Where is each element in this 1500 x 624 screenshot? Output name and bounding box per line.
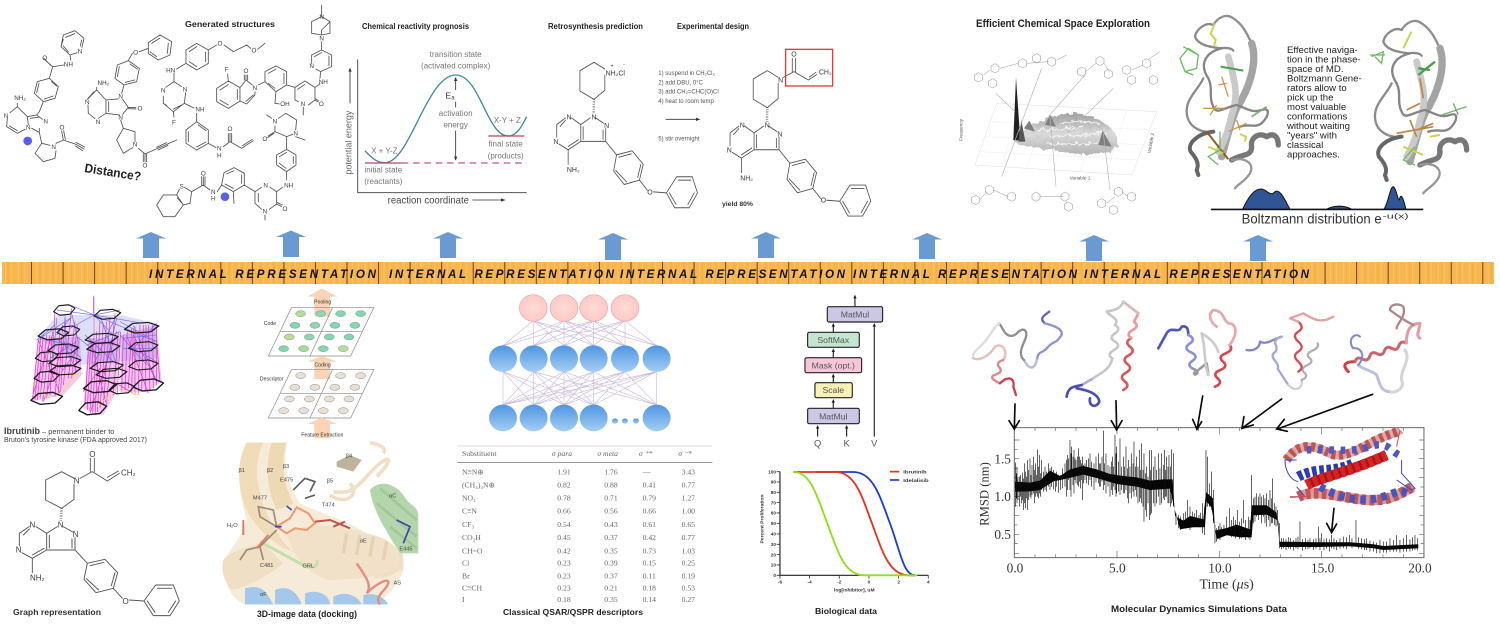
chart: reaction energy diagram: (activated complex) bbox=[421, 62, 491, 71]
chart: chemical space surface plot: Variable 1 bbox=[1070, 175, 1091, 180]
chart: Boltzmann distribution: -u(x) bbox=[1383, 213, 1409, 220]
table: QSAR descriptors: 0.78 bbox=[557, 494, 571, 503]
heading: biological data: Biological data bbox=[815, 606, 877, 616]
text: experimental procedure: 4) heat to room temp bbox=[658, 99, 715, 105]
molecule: retrosynthesis precursor bbox=[553, 61, 698, 208]
chart: reaction energy diagram: a bbox=[451, 96, 455, 102]
chart: RMSD time series: RMSD (nm) bbox=[978, 462, 992, 526]
conformation 2 bbox=[1067, 302, 1138, 406]
molecule: generated 5: S bbox=[180, 183, 184, 190]
band: internal representation: INTERNAL REPRESENTATION bbox=[853, 268, 1078, 281]
molecule: generated 4: OH bbox=[280, 101, 290, 108]
chart: dose response: 20 bbox=[771, 552, 776, 557]
molecule: ibrutinib graph representation: N bbox=[73, 530, 79, 539]
molecule: retrosynthesis precursor: - bbox=[623, 61, 625, 67]
table: QSAR descriptors: 0.77 bbox=[682, 480, 695, 489]
chart: reaction energy diagram: initial state bbox=[364, 165, 403, 174]
diagram: 3D convolution grids: Code bbox=[264, 321, 276, 327]
table: QSAR descriptors: C≡N bbox=[462, 507, 477, 516]
trace core bbox=[1015, 466, 1418, 550]
conformation 4 bbox=[1247, 313, 1333, 389]
table: QSAR descriptors: 0.54 bbox=[557, 520, 571, 529]
table: QSAR descriptors: 0.66 bbox=[643, 507, 656, 516]
table: QSAR descriptors: 0.37 bbox=[604, 533, 618, 542]
chart: dose response: 10 bbox=[771, 563, 776, 568]
molecule: generated 3: F bbox=[172, 119, 176, 126]
table: QSAR descriptors: 0.66 bbox=[557, 507, 571, 516]
molecule: generated 5: O bbox=[201, 171, 206, 178]
molecule: retrosynthesis precursor: N bbox=[566, 114, 572, 121]
molecule: reference ligand with distance marker: N bbox=[78, 48, 83, 55]
text: yield: yield 80% bbox=[722, 201, 753, 208]
chart: chemical space surface plot: Frequency bbox=[959, 118, 964, 141]
molecule: generated 2: N bbox=[118, 114, 123, 121]
chart: dose response: 2 bbox=[897, 579, 900, 584]
molecule: ibrutinib graph representation: N bbox=[74, 477, 80, 486]
molecule: experimental product: N bbox=[740, 123, 745, 130]
chart: RMSD time series: Time (μs) bbox=[1199, 577, 1254, 592]
table: QSAR descriptors: 0.65 bbox=[682, 520, 695, 529]
table: QSAR descriptors: 0.27 bbox=[682, 595, 695, 604]
molecule: generated 3: N bbox=[183, 87, 188, 94]
illustration: docking 3D view: E475 bbox=[280, 478, 293, 484]
table: QSAR descriptors: 0.23 bbox=[557, 584, 571, 593]
chart: reaction energy diagram: transition state bbox=[430, 50, 482, 59]
arrow: feature extraction bbox=[307, 418, 337, 438]
chart: RMSD time series: 20.0 bbox=[1408, 561, 1432, 576]
molecule: generated 4: O bbox=[319, 101, 324, 108]
table: QSAR descriptors: σ para bbox=[552, 449, 572, 458]
molecule: reference ligand with distance marker bbox=[4, 31, 85, 162]
text: experimental procedure: 2) add DBU, 0°C bbox=[658, 80, 704, 86]
conformation 1 bbox=[973, 312, 1062, 395]
arrow: pooling bbox=[307, 288, 337, 317]
text: Ibrutinib description: Ibrutinib – permanent binder to bbox=[4, 426, 114, 436]
illustration: docking 3D view: E445 bbox=[399, 546, 413, 552]
illustration: protein conformation B bbox=[1370, 21, 1467, 193]
molecule: reference ligand with distance marker: O bbox=[42, 55, 47, 62]
chart: dose response: 100 bbox=[768, 469, 776, 474]
molecule: retrosynthesis precursor: O bbox=[647, 189, 653, 196]
molecule: experimental product: O bbox=[821, 198, 827, 205]
table: QSAR descriptors: 0.37 bbox=[604, 571, 618, 580]
molecule: experimental product: N bbox=[765, 122, 770, 129]
chart: RMSD time series: 0.0 bbox=[1007, 561, 1024, 576]
chart: reaction energy diagram: reaction coordinate bbox=[388, 195, 469, 206]
molecule: generated 5 bbox=[157, 113, 305, 220]
molecule: generated 3 bbox=[161, 41, 265, 159]
molecule: generated 4: NH bbox=[319, 79, 328, 86]
text: Ibrutinib description bbox=[4, 426, 147, 444]
table: QSAR descriptors: 0.11 bbox=[643, 571, 656, 580]
chart: Boltzmann distribution: Boltzmann distribution e bbox=[1242, 210, 1382, 226]
chart: dose response: log[inhibitor], uM bbox=[834, 588, 875, 594]
molecule: generated 3: O bbox=[228, 126, 233, 133]
molecule: reference ligand with distance marker: N bbox=[26, 125, 31, 132]
table: QSAR descriptors: 0.42 bbox=[643, 533, 656, 542]
molecule: generated 2: O bbox=[143, 163, 148, 170]
table: QSAR descriptors: 0.79 bbox=[643, 494, 656, 503]
illustration: docking 3D view: AS bbox=[394, 581, 401, 587]
diagram: scaled dot product attention: Q bbox=[814, 438, 821, 448]
molecule: generated 2: N bbox=[118, 94, 123, 101]
molecule: generated 4: N bbox=[319, 36, 324, 43]
table: QSAR descriptors: N≡N⊕ bbox=[462, 467, 484, 476]
chart: dose response: -2 bbox=[837, 579, 842, 584]
molecule: generated 5: N bbox=[211, 189, 216, 196]
table: QSAR descriptors: 3.43 bbox=[682, 467, 695, 476]
molecule: ibrutinib graph representation: O bbox=[123, 597, 129, 606]
chart: reaction energy diagram bbox=[344, 50, 527, 206]
chart: reaction energy diagram: activation bbox=[439, 109, 473, 118]
table: QSAR descriptors: Br bbox=[462, 571, 470, 580]
table: QSAR descriptors: CF₃ bbox=[462, 520, 474, 529]
chart: reaction energy diagram: (products) bbox=[488, 151, 524, 160]
heading: chemical space: Efficient Chemical Space Exploration bbox=[976, 18, 1150, 30]
highlight: red box around acryl group bbox=[786, 49, 833, 86]
molecule: generated 5: N bbox=[273, 118, 278, 125]
molecule: retrosynthesis precursor: NH₂ bbox=[567, 167, 580, 174]
molecule: generated 3: N bbox=[161, 88, 166, 95]
diagram: 3D convolution grids: Descriptor bbox=[260, 377, 284, 383]
heading: chemical reactivity: Chemical reactivity prognosis bbox=[362, 22, 469, 31]
chart: dose response: 30 bbox=[771, 542, 776, 547]
text: experimental procedure bbox=[658, 71, 719, 142]
arrows: eight blue upward arrows bbox=[136, 230, 1273, 261]
table: QSAR descriptors: 0.14 bbox=[643, 595, 656, 604]
illustration: docking 3D view: C481 bbox=[260, 563, 273, 569]
icon: blue dot on reference ligand bbox=[23, 137, 32, 145]
molecule: generated 4: F bbox=[225, 67, 229, 74]
molecule: reference ligand with distance marker: N bbox=[4, 113, 9, 120]
trace spikes bbox=[1015, 431, 1417, 553]
table: QSAR descriptors: 1.00 bbox=[682, 507, 695, 516]
molecule: generated 3: HN bbox=[166, 67, 176, 74]
table: QSAR descriptors: 0.73 bbox=[643, 546, 656, 555]
molecule: generated 5: H bbox=[211, 196, 216, 203]
heading: QSAR descriptors: Classical QSAR/QSPR descriptors bbox=[503, 607, 643, 617]
molecule: generated 2: NH₂ bbox=[98, 80, 110, 87]
text: effective navigation: without waiting bbox=[1286, 121, 1350, 132]
molecule: generated 2: N bbox=[133, 142, 138, 149]
illustration: protein conformation A bbox=[1180, 16, 1278, 188]
chart: dose response: 0 bbox=[773, 573, 776, 578]
diagram: scaled dot product attention: Mask (opt.) bbox=[812, 360, 855, 370]
molecule: ibrutinib graph representation: N bbox=[58, 521, 64, 530]
chart: reaction energy diagram: potential energy bbox=[344, 110, 354, 175]
diagram: 3D convolution grids bbox=[260, 288, 374, 439]
molecule: generated 2: O bbox=[138, 106, 143, 113]
text: Ibrutinib description: Bruton's tyrosine kinase (FDA approved 2017) bbox=[4, 437, 147, 444]
heading: experimental design: Experimental design bbox=[677, 21, 749, 31]
molecule: reference ligand with distance marker: NH bbox=[64, 62, 73, 69]
molecule: generated 4: N bbox=[253, 85, 258, 92]
diagram: 3D convolution grids: Coding bbox=[314, 363, 331, 369]
molecule: reference ligand with distance marker: N bbox=[51, 144, 56, 151]
molecule: retrosynthesis precursor: + bbox=[610, 64, 614, 70]
text: experimental procedure: 1) suspend in CH₂Cl₂ bbox=[658, 71, 716, 77]
table: QSAR descriptors: CO₂H bbox=[462, 533, 481, 542]
table: QSAR descriptors: CH=O bbox=[462, 546, 483, 555]
table: QSAR descriptors: σ meta bbox=[597, 449, 618, 458]
chart: dose response: Idelalisib bbox=[903, 478, 929, 484]
label: distance question: Distance? bbox=[84, 161, 142, 184]
arrows: conformations to time points bbox=[1009, 394, 1373, 533]
molecule: generated 3: H bbox=[217, 152, 222, 159]
illustration: docking 3D view bbox=[222, 443, 418, 604]
table: QSAR descriptors: — bbox=[642, 467, 651, 476]
text: effective navigation: classical bbox=[1287, 140, 1323, 151]
band: internal representation bbox=[2, 262, 1494, 284]
band: internal representation: INTERNAL REPRESENTATION bbox=[620, 268, 846, 281]
chart: dose response: -6 bbox=[778, 579, 782, 584]
chart: reaction energy diagram: X-Y + Z bbox=[494, 116, 521, 125]
chart: dose response: 70 bbox=[771, 500, 776, 505]
band: internal representation: INTERNAL REPRESENTATION bbox=[1084, 268, 1310, 281]
molecule: generated 5: N bbox=[263, 182, 268, 189]
molecule: generated 5: O bbox=[283, 206, 288, 213]
table: QSAR descriptors: 0.21 bbox=[604, 584, 618, 593]
molecule: experimental product: NH₂ bbox=[740, 175, 753, 182]
illustration: docking 3D view: αF bbox=[260, 592, 267, 598]
table: QSAR descriptors: 1.27 bbox=[682, 494, 695, 503]
molecule: reference ligand with distance marker: O bbox=[60, 125, 65, 132]
diagram: scaled dot product attention: Scale bbox=[822, 385, 844, 395]
band: internal representation: INTERNAL REPRESENTATION bbox=[149, 268, 377, 281]
chart: dose response: 0 bbox=[868, 579, 871, 584]
molecule: generated 3: NH bbox=[195, 106, 205, 113]
icon: blue dot on generated molecule bbox=[221, 192, 229, 201]
molecule: generated 5: N bbox=[263, 208, 268, 215]
table: QSAR descriptors: 0.35 bbox=[604, 595, 618, 604]
molecule: ibrutinib graph representation: O bbox=[89, 450, 95, 459]
diagram: scaled dot product attention: SoftMax bbox=[817, 335, 850, 345]
table: QSAR descriptors: 0.23 bbox=[557, 558, 571, 567]
molecule: ibrutinib graph representation: CH₂ bbox=[121, 468, 136, 477]
chart: dose response: 50 bbox=[771, 521, 776, 526]
diagram: 3D convolution grids: Pooling bbox=[314, 299, 331, 305]
chart: reaction energy diagram: final state bbox=[489, 140, 523, 149]
table: QSAR descriptors: C≡CH bbox=[462, 584, 483, 593]
molecule: generated 5: NH bbox=[284, 182, 294, 189]
table: QSAR descriptors: 1.76 bbox=[604, 467, 618, 476]
chart: Boltzmann distribution bbox=[1211, 187, 1423, 226]
table: QSAR descriptors: 1.03 bbox=[682, 546, 695, 555]
text: effective navigation: rators allow to bbox=[1287, 83, 1347, 94]
illustration: docking 3D view: β1 bbox=[238, 468, 245, 474]
chart: reaction energy diagram: X + Y-Z bbox=[371, 147, 398, 156]
molecule: generated 3: O bbox=[252, 47, 257, 54]
conformation 3 bbox=[1158, 310, 1235, 387]
illustration: docking 3D view: αE bbox=[360, 539, 367, 545]
molecule sketches around the plot bbox=[972, 52, 1160, 215]
chart: RMSD time series: 5.0 bbox=[1109, 561, 1126, 576]
text: experimental procedure: 3) add CH₂=CHC(O)Cl bbox=[658, 90, 719, 96]
heading: graph representation: Graph representation bbox=[13, 607, 101, 617]
chart: RMSD time series: 1.0 bbox=[994, 489, 1011, 504]
table: QSAR descriptors: σ ⁻* bbox=[678, 449, 692, 458]
table: QSAR descriptors: Cl bbox=[462, 558, 469, 567]
table: QSAR descriptors: 0.18 bbox=[557, 595, 571, 604]
table: QSAR descriptors: σ ⁺* bbox=[639, 449, 653, 458]
inset: folded protein overlay bbox=[1285, 430, 1415, 500]
diagram: scaled dot product attention: MatMul bbox=[841, 309, 869, 319]
text: effective navigation: tion in the phase- bbox=[1287, 54, 1361, 66]
molecule: generated 4: N bbox=[309, 63, 314, 70]
table: QSAR descriptors: 0.35 bbox=[604, 546, 618, 555]
molecule: generated 3: N bbox=[217, 146, 222, 153]
text: experimental procedure: 5) stir overnight bbox=[658, 136, 700, 142]
molecule: generated 2: N bbox=[85, 99, 90, 106]
illustration: docking 3D view: T474 bbox=[322, 502, 335, 508]
chart: dose response: 90 bbox=[771, 480, 776, 485]
chart: dose response: 80 bbox=[771, 490, 776, 495]
molecule: experimental product: O bbox=[791, 51, 797, 58]
molecule: experimental product: N bbox=[777, 131, 782, 138]
text: effective navigation: most valuable bbox=[1287, 102, 1346, 113]
table: QSAR descriptors: 1.91 bbox=[557, 467, 571, 476]
chart: dose response: 4 bbox=[927, 579, 930, 584]
diagram: scaled dot product attention: K bbox=[844, 438, 851, 448]
illustration: docking 3D view: β4 bbox=[346, 454, 352, 460]
table: QSAR descriptors: 0.23 bbox=[557, 571, 571, 580]
molecule: reference ligand with distance marker: N bbox=[43, 119, 48, 126]
table: QSAR descriptors: 0.41 bbox=[643, 480, 656, 489]
table: QSAR descriptors: 0.39 bbox=[604, 558, 618, 567]
chart: RMSD time series: 1.5 bbox=[994, 451, 1011, 466]
table: QSAR descriptors: 0.19 bbox=[682, 571, 695, 580]
molecule: generated 4: N bbox=[301, 101, 306, 108]
conformation 5 bbox=[1345, 304, 1420, 392]
molecule: generated 5: O bbox=[263, 136, 268, 143]
molecule: ibrutinib graph representation bbox=[16, 450, 179, 616]
molecule: experimental product: N bbox=[778, 78, 783, 85]
molecule: experimental product: CH₂ bbox=[819, 70, 832, 77]
chart: dose response: Percent Proliferation bbox=[760, 494, 766, 543]
molecule: ibrutinib graph representation: NH₂ bbox=[30, 573, 45, 582]
chart: dose response bbox=[760, 469, 930, 594]
illustrations: MD unfolded conformations bbox=[973, 302, 1420, 406]
chart: chemical space surface plot: Variable 2 bbox=[1147, 132, 1155, 154]
table: QSAR descriptors: 0.88 bbox=[604, 480, 618, 489]
molecule: generated 2: N bbox=[96, 119, 101, 126]
chart: RMSD time series: 0.5 bbox=[994, 527, 1011, 542]
molecule: generated 4: N bbox=[319, 14, 324, 21]
chart: dose response: Ibrutinib bbox=[903, 469, 927, 475]
heading: retrosynthesis: Retrosynthesis prediction bbox=[548, 21, 643, 31]
molecule: retrosynthesis precursor: N bbox=[604, 123, 609, 130]
molecule: ibrutinib graph representation: N bbox=[16, 546, 22, 555]
table: QSAR descriptors bbox=[457, 446, 712, 604]
chart: RMSD time series: 15.0 bbox=[1311, 561, 1335, 576]
molecule: generated 5: N bbox=[293, 130, 298, 137]
text: effective navigation: "years" with bbox=[1287, 130, 1337, 142]
text: effective navigation: space of MD. bbox=[1287, 64, 1344, 75]
table: QSAR descriptors: NO₂ bbox=[462, 494, 476, 503]
chart: reaction energy diagram: E bbox=[445, 90, 451, 100]
table: QSAR descriptors: 0.53 bbox=[682, 584, 695, 593]
text: effective navigation: Effective naviga- bbox=[1287, 45, 1358, 56]
molecule: retrosynthesis precursor: N bbox=[553, 139, 559, 146]
molecule: generated 2: O bbox=[133, 49, 138, 56]
illustration: docking 3D view: β3 bbox=[283, 464, 289, 470]
text: effective navigation: Boltzmann Gene- bbox=[1287, 74, 1362, 84]
table: QSAR descriptors: (CH₃)₃N⊕ bbox=[462, 480, 495, 489]
table: QSAR descriptors: Substituent bbox=[462, 449, 497, 458]
diagram: scaled dot product attention bbox=[805, 295, 883, 448]
molecule: experimental product: N bbox=[727, 147, 732, 154]
chart: chemical space surface plot bbox=[959, 52, 1160, 215]
table: QSAR descriptors: 0.43 bbox=[604, 520, 618, 529]
table: QSAR descriptors: 0.77 bbox=[682, 533, 695, 542]
molecule: generated 3: O bbox=[218, 41, 223, 48]
table: QSAR descriptors: 0.15 bbox=[643, 558, 656, 567]
chart: RMSD time series bbox=[978, 394, 1432, 592]
table: QSAR descriptors: 0.45 bbox=[557, 533, 571, 542]
illustration: docking 3D view: GRL bbox=[302, 564, 314, 570]
heading: generated structures: Generated structures bbox=[185, 19, 275, 29]
panel: generated structures bbox=[4, 5, 332, 220]
molecule: generated 4: O bbox=[244, 68, 249, 75]
molecule: retrosynthesis precursor: N bbox=[591, 114, 596, 121]
arrow: coding bbox=[307, 356, 337, 379]
illustration: docking 3D view: αC bbox=[389, 494, 396, 500]
band: internal representation: INTERNAL REPRESENTATION bbox=[389, 268, 615, 281]
illustration: docking 3D view: β5 bbox=[327, 479, 333, 485]
diagram: scaled dot product attention: V bbox=[871, 438, 878, 448]
table: QSAR descriptors: 0.82 bbox=[557, 480, 571, 489]
table: QSAR descriptors: 0.56 bbox=[604, 507, 618, 516]
molecule: ibrutinib graph representation: N bbox=[29, 521, 35, 530]
illustration: docking 3D view: H₂O bbox=[227, 523, 238, 529]
table: QSAR descriptors: 0.42 bbox=[557, 546, 571, 555]
table: QSAR descriptors: 0.18 bbox=[643, 584, 656, 593]
diagram: scaled dot product attention: MatMul bbox=[819, 411, 848, 421]
chart: reaction energy diagram: energy bbox=[443, 121, 468, 130]
molecule: retrosynthesis precursor: NH₂Cl bbox=[606, 70, 625, 77]
molecule: generated 4 bbox=[217, 5, 332, 115]
table: QSAR descriptors: I bbox=[462, 595, 465, 604]
illustration: docking 3D view: M477 bbox=[253, 495, 267, 501]
text: effective navigation: pick up the bbox=[1287, 92, 1333, 104]
heading: molecular dynamics data: Molecular Dynamics Simulations Data bbox=[1111, 604, 1287, 614]
chart: reaction energy diagram: (reactants) bbox=[364, 177, 403, 186]
table: QSAR descriptors: 0.71 bbox=[604, 494, 618, 503]
chart: dose response: 40 bbox=[771, 532, 776, 537]
illustration: docking 3D view: β2 bbox=[267, 468, 273, 474]
molecule: experimental product bbox=[727, 49, 871, 216]
chart: dose response: -4 bbox=[808, 579, 812, 584]
diagram: neural network bbox=[489, 295, 671, 431]
heading: 3D image data: 3D-image data (docking) bbox=[257, 609, 357, 619]
chart: RMSD time series: 10.0 bbox=[1208, 561, 1232, 576]
molecule: generated 2 bbox=[85, 35, 177, 170]
table: QSAR descriptors: 0.61 bbox=[643, 520, 656, 529]
table: QSAR descriptors: 0.25 bbox=[682, 558, 695, 567]
diagram: 3D convolution grids: Feature Extraction bbox=[301, 433, 343, 439]
text: effective navigation: approaches. bbox=[1287, 150, 1340, 160]
chart: dose response: 60 bbox=[771, 511, 776, 516]
illustration: hexagonal graph lattice bbox=[31, 296, 164, 415]
molecule: reference ligand with distance marker: NH₂ bbox=[14, 95, 26, 102]
text: effective navigation: conformations bbox=[1287, 112, 1347, 122]
